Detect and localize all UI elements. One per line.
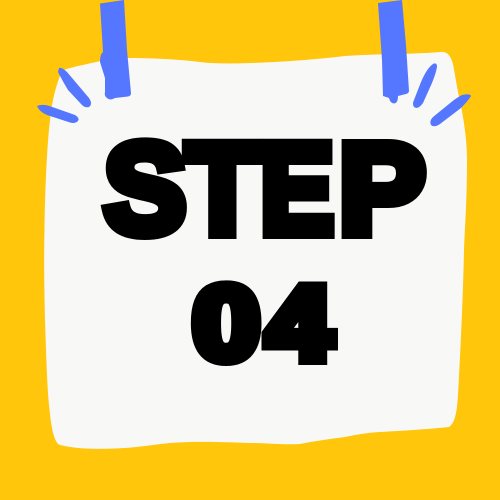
heading: STEP: P [339,119,425,261]
icon: left upper spark [58,68,91,107]
heading: STEP [104,117,425,261]
heading: STEP: E [260,118,334,261]
heading: STEP: T [186,118,259,261]
icon: left lower spark [37,105,79,123]
heading: 04 [193,265,332,381]
icon: right upper spark [413,63,437,108]
panel: paper note [44,52,467,449]
icon: left blue clip [100,0,131,100]
icon: right blue clip [378,0,409,104]
heading: 04: 0 [193,265,260,381]
icon: right lower spark [430,94,471,126]
heading: 04: 4 [266,265,332,381]
heading: STEP: S [104,117,186,261]
